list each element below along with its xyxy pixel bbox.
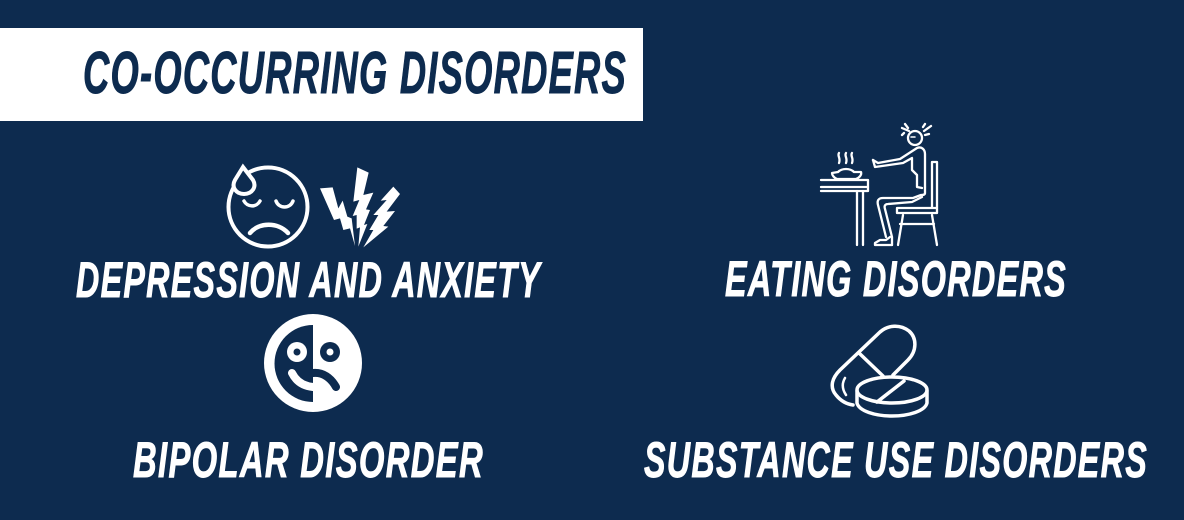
plate with steam	[832, 153, 861, 179]
icon: sad sweating face	[228, 167, 308, 246]
label: bipolar disorder: BIPOLAR DISORDER	[133, 432, 484, 488]
icon: half-and-half bipolar face	[264, 314, 362, 412]
chair	[897, 162, 937, 213]
title: CO-OCCURRING DISORDERS	[83, 40, 627, 106]
icon: person refusing food	[821, 124, 937, 245]
title banner	[0, 28, 643, 121]
icon: capsule and tablet	[832, 326, 927, 416]
icon: lightning bolts	[320, 167, 400, 247]
label: depression and anxiety: DEPRESSION AND ANXIETY	[76, 252, 543, 308]
table	[821, 180, 868, 191]
